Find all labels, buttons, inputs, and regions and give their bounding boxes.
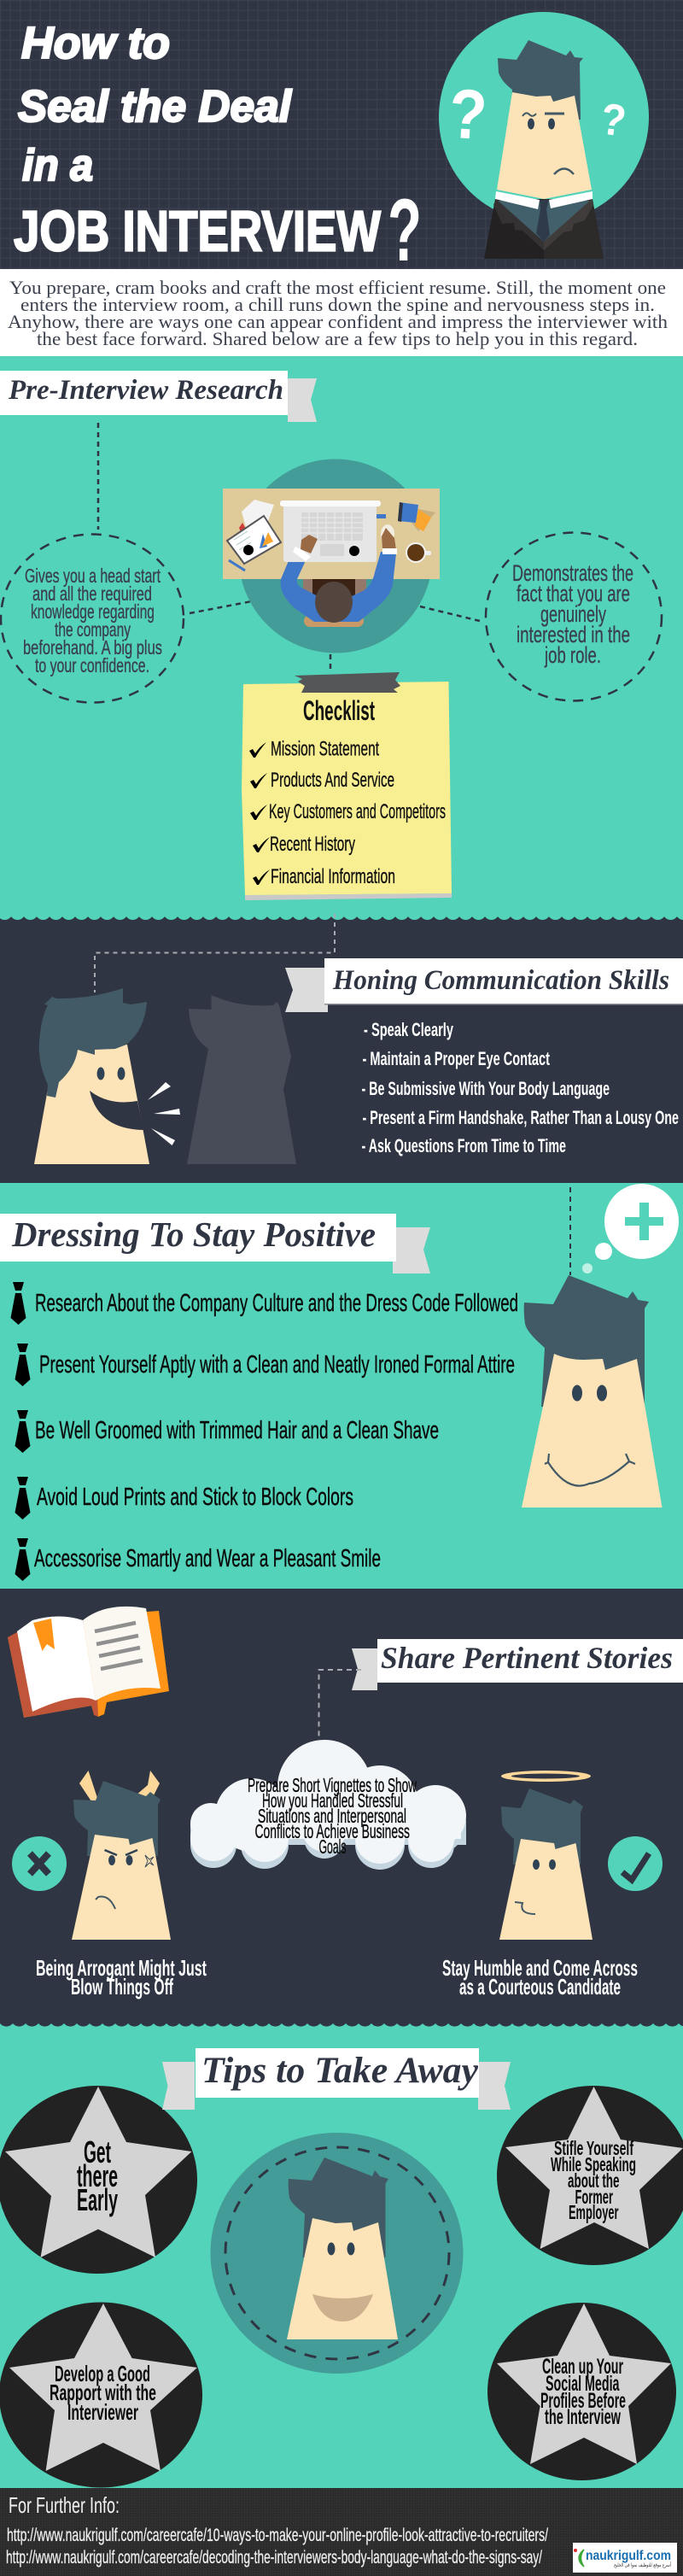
star: get there early: Early bbox=[77, 2182, 118, 2217]
callout: genuine interest: interested in the bbox=[517, 622, 630, 647]
callout: head start bbox=[1, 535, 184, 702]
star: stifle yourself: Employer bbox=[569, 2201, 619, 2223]
star: stifle yourself: Stifle Yourself bbox=[554, 2137, 633, 2159]
heading: Pre-Interview Research bbox=[0, 371, 317, 422]
caption: humble bbox=[442, 1955, 638, 1999]
cloud with vignettes text: Prepare Short Vignettes to Show bbox=[248, 1774, 417, 1796]
star: clean up profiles bbox=[487, 2303, 676, 2480]
callout: head start: beforehand. A big plus bbox=[23, 636, 162, 659]
callout: genuine interest bbox=[486, 533, 662, 700]
title: JOB INTERVIEW bbox=[14, 200, 382, 263]
list: dress tips with tie icons: Be Well Groomed with Trimmed Hair and a Clean Shave bbox=[35, 1417, 439, 1444]
callout: head start: and all the required bbox=[32, 583, 152, 605]
checklist items: Mission Statement bbox=[271, 738, 379, 760]
title: ? bbox=[388, 181, 422, 280]
icon: papers and chart bbox=[227, 500, 359, 571]
heading: Dressing To Stay Positive: Dressing To Stay Positive bbox=[11, 1215, 376, 1254]
panel: dressing to stay positive bbox=[0, 1183, 683, 1589]
heading: Honing Communication Skills: Honing Communication Skills bbox=[332, 965, 669, 996]
icon: happy man in dashed circle bbox=[210, 2133, 463, 2374]
icon: thought bubble with plus bbox=[582, 1184, 679, 1273]
panel: footer bbox=[0, 2488, 683, 2576]
panel: intro text: Anyhow, there are ways one can appear confident and impress the interviewer with bbox=[8, 311, 668, 332]
title: How to bbox=[21, 19, 170, 68]
panel: intro text bbox=[0, 269, 683, 356]
icon: smiling man bbox=[522, 1275, 663, 1508]
list: communication tips: - Ask Questions From Time to Time bbox=[362, 1135, 566, 1156]
list: dress tips with tie icons: Avoid Loud Prints and Stick to Block Colors bbox=[37, 1484, 353, 1511]
icon: speaking man bbox=[34, 988, 180, 1164]
checklist items: Financial Information bbox=[271, 865, 395, 888]
panel: intro text: the best face forward. Shared below are a few tips to help you in this regard. bbox=[37, 328, 638, 349]
heading: Tips to Take Away: Tips to Take Away bbox=[201, 2051, 479, 2091]
icon: laptop bbox=[280, 501, 386, 562]
star: stifle yourself bbox=[497, 2086, 683, 2265]
star: develop rapport: Rapport with the bbox=[50, 2380, 156, 2405]
callout: genuine interest: job role. bbox=[544, 642, 601, 668]
panel: honing communication skills bbox=[0, 909, 683, 1183]
icon: open book bbox=[8, 1607, 169, 1718]
icon: puzzled man with question marks: ? bbox=[447, 75, 489, 155]
cloud with vignettes text: Goals bbox=[319, 1835, 347, 1858]
caption: arrogant: Blow Things Off bbox=[71, 1974, 173, 1999]
icon: listener silhouette bbox=[187, 995, 296, 1164]
list: communication tips bbox=[362, 1019, 679, 1156]
star: stifle yourself: Former bbox=[575, 2186, 613, 2208]
panel: checklist note bbox=[242, 672, 452, 900]
title: in a bbox=[22, 141, 93, 190]
cloud with vignettes text bbox=[190, 1740, 466, 1870]
footer heading: For Further Info: bbox=[9, 2492, 120, 2518]
icon: arrogant man with horns bbox=[72, 1771, 171, 1940]
heading: Pre-Interview Research: Pre-Interview Research bbox=[8, 375, 283, 406]
heading: Honing Communication Skills bbox=[285, 958, 683, 1012]
heading: Share Pertinent Stories bbox=[352, 1639, 683, 1690]
callout: head start: the company bbox=[55, 618, 131, 641]
checklist items: Key Customers and Competitors bbox=[269, 800, 446, 823]
checklist items: Products And Service bbox=[271, 769, 394, 792]
icon: coffee cup bbox=[406, 542, 431, 563]
list: dress tips with tie icons bbox=[10, 1282, 518, 1581]
panel: pre-interview research bbox=[0, 356, 683, 920]
caption: arrogant bbox=[36, 1955, 207, 1999]
icon: humble man with halo bbox=[499, 1771, 593, 1940]
icon: puzzled man with question marks bbox=[439, 12, 649, 259]
title bbox=[14, 19, 422, 280]
star: clean up profiles: Social Media bbox=[546, 2372, 620, 2396]
star: get there early: Get bbox=[84, 2134, 111, 2169]
star: develop rapport: Develop a Good bbox=[55, 2361, 150, 2386]
icon: person at desk bbox=[223, 460, 440, 653]
panel: intro text: enters the interview room, a chill runs down the spine and nervousness steps in. bbox=[20, 294, 655, 315]
callout: head start: Gives you a head start bbox=[25, 565, 161, 587]
heading: Share Pertinent Stories: Share Pertinent Stories bbox=[381, 1641, 673, 1675]
icon: check badge bbox=[608, 1836, 663, 1891]
star: stifle yourself: about the bbox=[568, 2169, 620, 2192]
list: dress tips with tie icons: Accessorise Smartly and Wear a Pleasant Smile bbox=[34, 1545, 381, 1572]
cloud with vignettes text: Situations and Interpersonal bbox=[258, 1805, 406, 1827]
icon: hands and mouse bbox=[293, 524, 397, 561]
panel: intro text: You prepare, cram books and craft the most efficient resume. Still, the moment one bbox=[9, 277, 666, 298]
icon: tape bbox=[295, 672, 400, 693]
dashed connectors bbox=[98, 423, 483, 673]
star: develop rapport: Interviewer bbox=[67, 2399, 138, 2425]
logo: naukrigulf: naukrigulf.com bbox=[586, 2549, 671, 2563]
icon: notebooks bbox=[398, 502, 435, 531]
list: communication tips: - Maintain a Proper Eye Contact bbox=[362, 1048, 550, 1069]
heading: Tips to Take Away bbox=[162, 2048, 511, 2110]
caption: arrogant: Being Arrogant Might Just bbox=[36, 1955, 207, 1981]
cloud with vignettes text: Conflicts to Achieve Business bbox=[254, 1820, 410, 1842]
checklist items bbox=[249, 738, 446, 888]
title: Seal the Deal bbox=[18, 82, 293, 132]
panel: share pertinent stories bbox=[0, 1589, 683, 2026]
callout: head start: knowledge regarding bbox=[31, 600, 155, 623]
icon: X badge bbox=[12, 1836, 67, 1891]
suit bbox=[484, 191, 604, 259]
list: communication tips: - Speak Clearly bbox=[364, 1019, 453, 1040]
star: clean up profiles: Clean up Your bbox=[542, 2355, 623, 2379]
star: get there early: there bbox=[77, 2158, 118, 2193]
callout: genuine interest: genuinely bbox=[540, 601, 606, 627]
icon: puzzled man with question marks: ? bbox=[598, 94, 629, 147]
checklist items: Recent History bbox=[270, 833, 355, 856]
callout: head start: to your confidence. bbox=[35, 654, 149, 676]
logo: naukrigulf bbox=[573, 2543, 677, 2573]
panel: tips to take away bbox=[0, 2016, 683, 2488]
callout: genuine interest: fact that you are bbox=[517, 581, 630, 606]
star: get there early bbox=[0, 2086, 197, 2274]
links bbox=[6, 2526, 548, 2567]
heading: Dressing To Stay Positive bbox=[0, 1214, 430, 1273]
panel: header bbox=[0, 0, 683, 280]
heading: checklist: Checklist bbox=[303, 695, 375, 726]
star: clean up profiles: the Interview bbox=[545, 2405, 621, 2429]
cloud with vignettes text: How you Handled Stressful bbox=[262, 1789, 403, 1812]
star: develop rapport bbox=[0, 2303, 202, 2487]
